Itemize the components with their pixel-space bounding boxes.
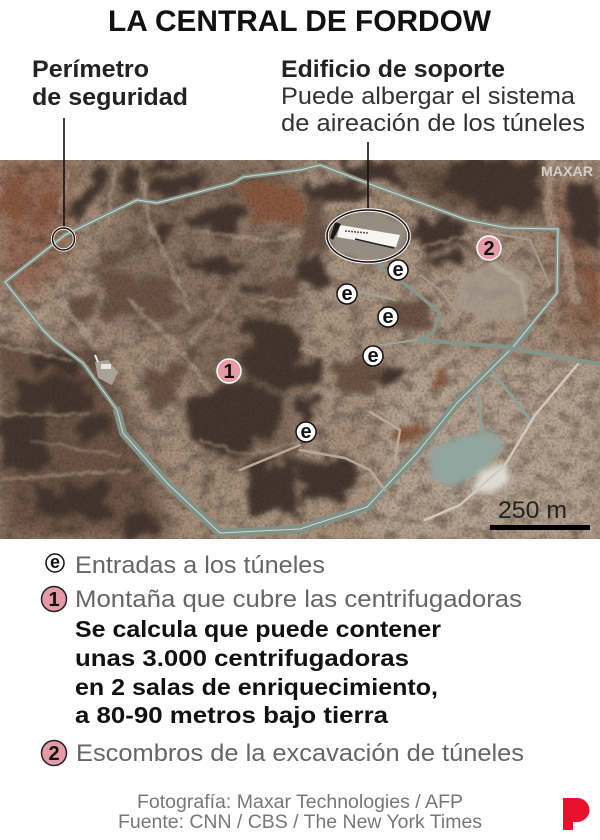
pale valleys <box>0 160 575 480</box>
source credits <box>118 792 482 833</box>
callout: perímetro de seguridad <box>32 56 188 111</box>
marker 2 <box>477 236 501 260</box>
scale bar <box>490 497 590 530</box>
callout: perímetro de seguridad: Perímetro <box>32 56 149 83</box>
legend: centrifuge detail: unas 3.000 centrifugadoras <box>75 645 409 671</box>
legend: centrifuge detail: a 80-90 metros bajo tierra <box>75 702 388 728</box>
legend: centrifuge detail: Se calcula que puede contener <box>75 616 441 642</box>
marker 1: 1 <box>223 361 235 383</box>
legend: mountain: Montaña que cubre las centrifugadoras <box>75 586 522 613</box>
callout: edificio de soporte: Puede albergar el sistema <box>281 83 576 110</box>
tunnel entrance markers: e <box>341 283 353 305</box>
title: LA CENTRAL DE FORDOW <box>108 5 492 38</box>
tunnel entrance markers <box>296 259 408 443</box>
tunnel entrance markers: e <box>382 306 394 328</box>
legend: centrifuge detail: en 2 salas de enriquecimiento, <box>75 674 438 700</box>
leader: perímetro <box>52 118 74 250</box>
support building <box>330 213 406 259</box>
callout: perímetro de seguridad: de seguridad <box>32 84 188 111</box>
tunnel entrance markers: e <box>300 421 312 443</box>
guard post <box>95 355 118 385</box>
source credits: Fotografía: Maxar Technologies / AFP <box>137 792 463 813</box>
source credits: Fuente: CNN / CBS / The New York Times <box>118 812 482 833</box>
legend: debris: 2 <box>48 743 60 765</box>
tunnel entrance markers: e <box>367 345 379 367</box>
logo: P <box>563 798 590 830</box>
callout: edificio de soporte: de aireación de los túneles <box>281 110 585 137</box>
mottled relief <box>0 160 600 539</box>
satellite photo <box>0 160 600 539</box>
legend: tunnel entrances: Entradas a los túneles <box>75 552 325 579</box>
logo: maxar: MAXAR <box>541 163 593 179</box>
legend: mountain: 1 <box>48 589 60 611</box>
callout: edificio de soporte <box>281 56 585 137</box>
scale bar: 250 m <box>498 497 567 524</box>
dark ridges <box>0 160 600 539</box>
leader: edificio de soporte <box>327 142 409 262</box>
grain <box>0 160 600 539</box>
tunnel entrance markers: e <box>392 259 404 281</box>
marker 1 <box>217 359 241 383</box>
callout: edificio de soporte: Edificio de soporte <box>281 56 505 83</box>
marker 2: 2 <box>483 238 495 260</box>
legend: debris: Escombros de la excavación de túneles <box>76 740 524 767</box>
excavation spoil <box>455 262 530 322</box>
legend: tunnel entrances: e <box>50 552 60 572</box>
mine tailings <box>430 430 510 492</box>
perimeter road <box>5 165 600 533</box>
legend: centrifuge detail <box>75 616 441 728</box>
terrain tones <box>0 160 600 539</box>
